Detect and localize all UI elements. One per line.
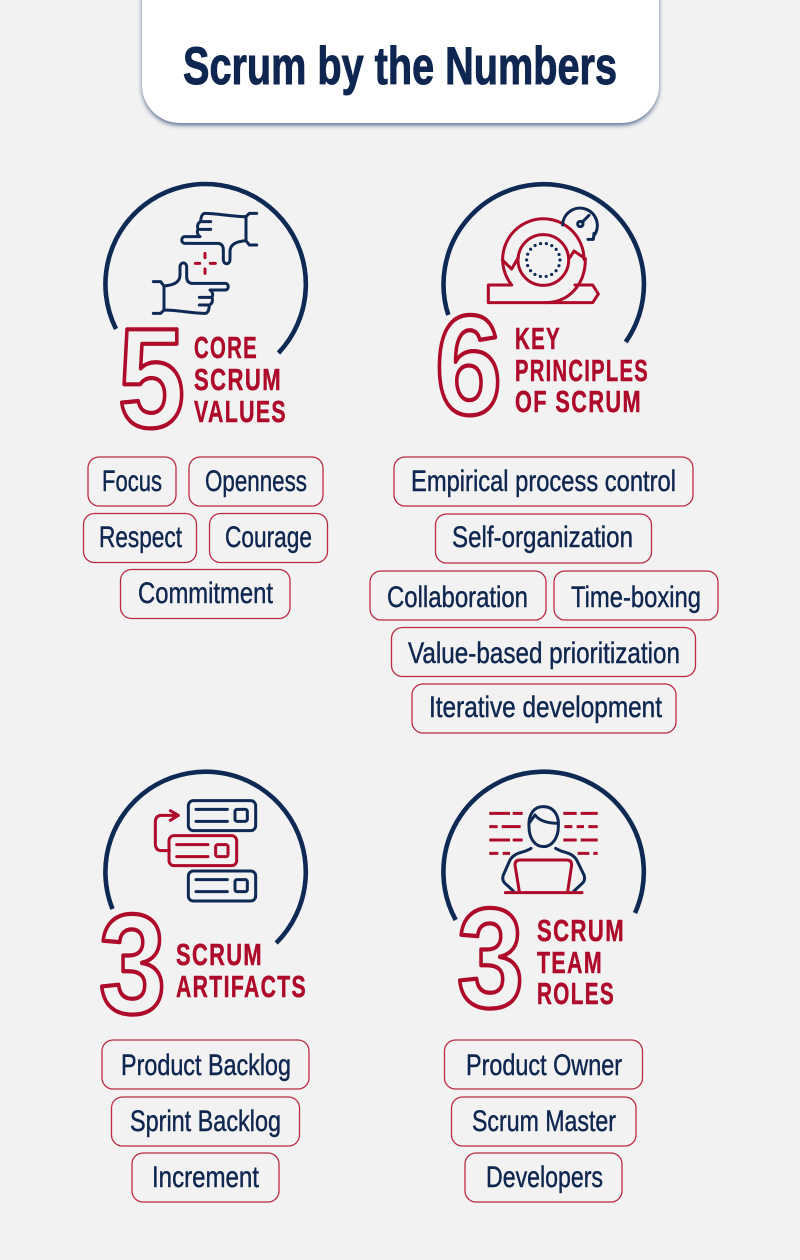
- panel: 6 key principles of scrum: [370, 184, 718, 733]
- icon: sprint cycle with gauge: [488, 208, 598, 303]
- label: scrum artifacts: ARTIFACTS: [176, 969, 307, 1004]
- label: core scrum values: [194, 330, 287, 429]
- pill: Scrum Master: [452, 1097, 636, 1146]
- big number 5: 5: [118, 299, 185, 458]
- artifacts list: [102, 1040, 309, 1202]
- pill: Increment: [132, 1153, 279, 1202]
- pill: Openness: Openness: [205, 465, 307, 498]
- pill: Product Owner: [444, 1040, 642, 1089]
- label: key principles of scrum: KEY: [515, 321, 561, 356]
- label: key principles of scrum: OF SCRUM: [515, 384, 642, 419]
- icon: backlog items: [155, 801, 256, 901]
- principles list: [370, 457, 718, 733]
- pill: Product Backlog: [102, 1040, 309, 1089]
- pill: Courage: Courage: [225, 521, 312, 554]
- pill: Time-boxing: Time-boxing: [571, 581, 701, 614]
- pill: Value-based prioritization: [392, 628, 696, 676]
- pill: Commitment: Commitment: [138, 577, 273, 610]
- label: core scrum values: CORE: [194, 330, 258, 365]
- big number 3: 3: [99, 885, 166, 1044]
- label: scrum artifacts: [176, 937, 307, 1004]
- big number 6: 6: [435, 286, 502, 445]
- label: scrum team roles: TEAM: [537, 945, 603, 980]
- pill: Respect: [84, 514, 196, 562]
- values list: [84, 457, 328, 618]
- pill: Openness: [189, 457, 323, 506]
- pill: Developers: [465, 1153, 622, 1202]
- big number 3: 3: [457, 879, 524, 1038]
- pill: Developers: Developers: [486, 1161, 603, 1194]
- pill: Sprint Backlog: [112, 1097, 300, 1146]
- pill: Iterative development: Iterative development: [429, 691, 662, 724]
- pill: Product Backlog: Product Backlog: [121, 1049, 291, 1082]
- label: scrum artifacts: SCRUM: [176, 937, 263, 972]
- label: scrum team roles: ROLES: [537, 976, 615, 1011]
- pill: Value-based prioritization: Value-based prioritization: [408, 637, 680, 670]
- circle arc: [444, 184, 644, 342]
- pill: Courage: [210, 514, 328, 562]
- pill: Commitment: [120, 570, 290, 618]
- pill: Self-organization: [436, 514, 652, 563]
- panel: 3 scrum artifacts: [99, 772, 309, 1202]
- pill: Increment: Increment: [152, 1161, 259, 1194]
- label: scrum team roles: SCRUM: [537, 913, 625, 948]
- pill: Empirical process control: [394, 457, 693, 506]
- title: Scrum by the Numbers: [183, 37, 617, 96]
- pill: Collaboration: Collaboration: [387, 581, 528, 614]
- pill: Focus: Focus: [102, 465, 162, 498]
- pill: Focus: [88, 457, 176, 506]
- roles list: [444, 1040, 642, 1202]
- circle arc: [105, 184, 306, 353]
- pill: Self-organization: Self-organization: [452, 521, 633, 554]
- panel: 3 scrum team roles: [443, 772, 644, 1202]
- pill: Time-boxing: [554, 571, 718, 620]
- panel: 5 core scrum values: [84, 184, 328, 618]
- pill: Respect: Respect: [99, 521, 182, 554]
- label: key principles of scrum: PRINCIPLES: [515, 353, 649, 388]
- label: core scrum values: VALUES: [194, 394, 287, 429]
- pill: Sprint Backlog: Sprint Backlog: [130, 1105, 281, 1138]
- pill: Collaboration: [370, 571, 546, 620]
- pill: Scrum Master: Scrum Master: [472, 1105, 616, 1138]
- label: scrum team roles: [537, 913, 625, 1011]
- circle arc: [443, 772, 644, 920]
- icon: developer at laptop: [489, 807, 598, 893]
- label: key principles of scrum: [515, 321, 649, 419]
- pill: Product Owner: Product Owner: [466, 1049, 622, 1082]
- label: core scrum values: SCRUM: [194, 362, 282, 397]
- pill: Iterative development: [412, 684, 676, 733]
- circle arc: [105, 772, 306, 943]
- pill: Empirical process control: Empirical process control: [411, 465, 676, 498]
- title banner: [142, 0, 659, 123]
- icon: framing hands: [153, 213, 257, 313]
